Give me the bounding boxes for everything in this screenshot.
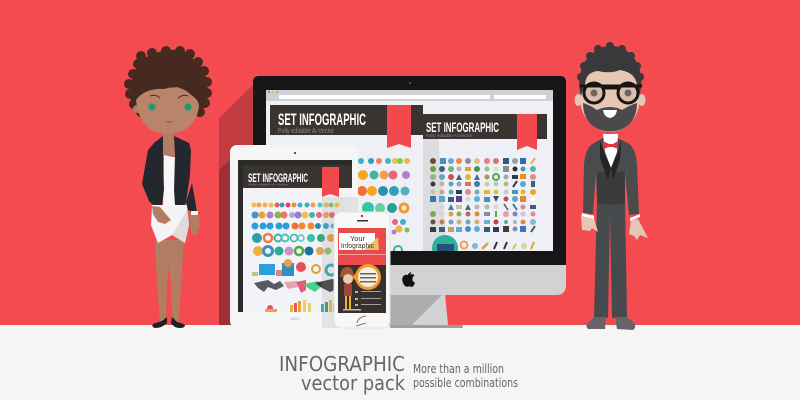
world maps [254,280,284,292]
tablet glare [322,197,358,328]
tablet header [243,165,352,188]
left page ribbon [387,105,411,148]
man character [574,42,648,330]
curly hair [577,42,644,96]
title text: INFOGRAPHIC [279,352,405,376]
subtitle text: possible combinations [413,376,518,390]
subtitle text [413,362,518,390]
legs [155,240,184,322]
phone character [340,267,355,309]
left page header [270,105,423,135]
phone screen [338,228,386,313]
mouth [603,110,617,118]
eyebrows [150,95,188,98]
cuff [191,211,198,215]
bar charts [267,305,273,311]
left page colour icons [357,158,410,254]
camera dot [409,82,411,84]
long shadow of devices [219,84,300,325]
red bow tie [603,141,618,149]
iMac monitor [253,76,566,328]
phone data rows [343,291,381,310]
ears [574,94,582,106]
beard [583,103,637,132]
title text [279,352,405,395]
iPhone [334,212,390,328]
left page divider [423,136,447,251]
face [580,64,640,132]
tablet camera [294,152,296,154]
neck and chest [163,126,175,158]
iPad tablet [230,145,358,328]
iPad tablet: SET INFOGRAPHIC [248,173,308,185]
floor panel [0,325,800,400]
right page icon grid [430,158,536,261]
orange speech bubble [352,264,381,290]
green eyes [148,104,156,110]
vest [597,172,625,205]
title text: vector pack [301,371,405,395]
ears [133,105,141,113]
mouth [164,120,174,123]
right arm hand [189,208,200,236]
monitor screen [266,90,553,261]
shoes [152,317,167,328]
monitor screen: SET INFOGRAPHIC [278,110,366,129]
monitor screen: Fully editable Ai Vector [426,133,473,138]
iPad tablet: Fully editable Ai Vector [248,182,288,186]
monitor screen: Fully editable Ai Vector [278,128,335,135]
small monitors [259,264,275,275]
face [136,87,199,134]
phone home button [356,316,366,326]
jacket and sleeves [583,138,639,215]
teal photoshop badge [432,235,458,251]
phone red subtitle band [338,254,386,255]
speaker [357,220,368,222]
woman character [124,46,212,328]
stand [390,294,448,325]
white top [163,155,175,207]
iPhone: Infographic [341,243,374,250]
your infographic title: Your [350,236,366,243]
curly hair [124,46,212,117]
black jacket [142,136,164,205]
hands [581,215,598,232]
tablet icons [252,202,344,312]
white skirt [151,205,189,243]
tablet home button [289,317,301,320]
white shirt and lapels [603,134,618,168]
phone red header [338,228,386,265]
shoes [586,317,606,329]
browser bar [266,90,553,101]
cuffs [582,213,594,219]
right page header [423,114,547,139]
black bezel [253,76,566,266]
subtitle text: More than a million [413,362,504,376]
left hand [152,206,171,224]
right page ribbon [517,114,537,150]
silver chin [300,265,566,295]
trousers [594,200,627,318]
tablet screen [238,160,352,312]
tablet ribbon [322,167,339,197]
monitor screen: SET INFOGRAPHIC [426,119,499,135]
apple logo [402,272,415,287]
eyeglasses [580,83,642,103]
